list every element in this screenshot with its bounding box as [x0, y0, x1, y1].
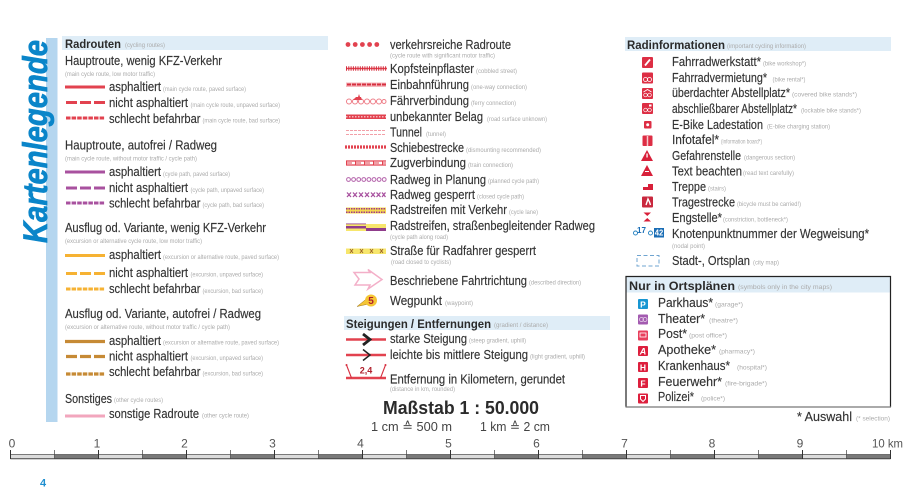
row: constriction: (constriction, bottleneck*)	[723, 218, 788, 224]
legend row: yellow paved: (excursion or alternative route, paved surface)	[163, 255, 279, 261]
legend row: purple paved	[65, 165, 230, 179]
scale bar	[9, 436, 903, 459]
row: read text carefully: Text beachten	[672, 164, 742, 178]
legend row: dismounting: (dismounting recommended)	[466, 148, 541, 154]
row: city map: (city map)	[753, 260, 779, 266]
legend row: brown unpaved: nicht asphaltiert	[109, 350, 188, 364]
group heading: Sonstiges	[65, 392, 163, 406]
legend row: distance: (distance in km, rounded)	[390, 387, 455, 393]
legend row: waypoint: (waypoint)	[445, 301, 473, 307]
scale numbers: 7	[621, 436, 628, 450]
row: bicycle must be carried: Tragestrecke	[672, 196, 735, 210]
legend row: purple unpaved: nicht asphaltiert	[109, 181, 188, 195]
legend row: red bad surface	[66, 112, 280, 126]
scale numbers: 8	[709, 436, 716, 450]
group heading: Ausflug wenig KFZ-Verkehr: Ausflug od. Variante, wenig KFZ-Verkehr	[65, 221, 266, 235]
legend row: closed path	[347, 188, 524, 202]
legend row: yellow unpaved: (excursion, unpaved surface)	[190, 272, 263, 278]
row: dangerous section: (dangerous section)	[744, 156, 795, 162]
legend row: planned path: Radweg in Planung	[390, 173, 486, 187]
title: Kartenlegende vertical band: Kartenlegende	[17, 40, 55, 243]
row: police: (police*)	[701, 396, 725, 402]
row: pharmacy: A	[639, 346, 646, 356]
group heading: Ausflug autofrei: Ausflug od. Variante, autofrei / Radweg	[65, 307, 261, 321]
heading: Radinformationen	[625, 37, 891, 52]
legend row: cycle lane: Radstreifen mit Verkehr	[390, 203, 507, 217]
legend row: waypoint: 5	[368, 296, 374, 307]
legend row: red bad surface: (main cycle route, bad surface)	[202, 118, 280, 124]
row: constriction: Engstelle*	[672, 211, 722, 225]
legend row: yellow bad surface	[66, 282, 263, 296]
group heading: Ausflug wenig KFZ-Verkehr	[65, 221, 266, 245]
legend row: red unpaved: nicht asphaltiert	[109, 96, 188, 110]
row: lockable bike stands: (lockable bike stands*)	[801, 108, 861, 114]
legend row: yellow paved: asphaltiert	[109, 248, 161, 262]
legend row: yellow unpaved	[66, 266, 263, 280]
legend row: yellow bad surface: (excursion, bad surface)	[202, 289, 263, 295]
legend row: cycle lane: (cycle lane)	[509, 210, 538, 216]
legend row: one-way: (one-way connection)	[471, 85, 527, 91]
legend row: distance	[346, 364, 565, 393]
legend row: tunnel: (tunnel)	[426, 132, 446, 138]
row: hospital: Krankenhaus*	[658, 359, 730, 373]
group heading: Hauptroute wenig KFZ-Verkehr: (main cycle route, low motor traffic)	[65, 72, 155, 78]
legend row: steep gradient: (steep gradient, uphill)	[469, 338, 526, 344]
row: post office: (post office*)	[689, 334, 727, 340]
footnote: Auswahl: (* selection)	[856, 416, 890, 422]
heading: Nur in Ortsplänen: Nur in Ortsplänen	[629, 279, 735, 293]
row: dangerous section	[641, 149, 795, 163]
legend row: red unpaved	[66, 96, 280, 110]
legend row: steep gradient	[346, 332, 526, 346]
row: bike workshop: (bike workshop*)	[763, 62, 806, 68]
row: dangerous section: Gefahrenstelle	[672, 149, 741, 163]
legend row: one-way: Einbahnführung	[390, 78, 469, 92]
legend row: closed path: (closed cycle path)	[477, 194, 524, 200]
title: Kartenlegende vertical band	[17, 38, 58, 422]
group heading: Ausflug autofrei	[65, 307, 261, 331]
legend row: train: (train connection)	[468, 163, 513, 169]
legend row: brown bad surface: (excursion, bad surface)	[202, 372, 263, 378]
legend row: other route	[65, 407, 249, 421]
legend row: direction arrow	[354, 270, 581, 289]
legend row: train: Zugverbindung	[390, 156, 466, 170]
row: city map: Stadt-, Ortsplan	[672, 254, 750, 268]
legend row: busy route	[348, 38, 511, 60]
legend row: path along road: (cycle path along road)	[390, 235, 448, 241]
scale numbers: 5	[445, 436, 452, 450]
heading: Radrouten: Radrouten	[65, 37, 121, 51]
legend row: steep gradient: starke Steigung	[390, 332, 467, 346]
heading: Nur in Ortsplänen	[629, 279, 832, 293]
row: bike rental	[642, 71, 806, 85]
scale equivalences: 1 km ≙ 2 cm	[480, 419, 550, 434]
legend row: unknown surface	[346, 110, 547, 124]
row: city map	[637, 254, 779, 268]
heading: Nur in Ortsplänen: (symbols only in the city maps)	[738, 285, 832, 291]
heading: Radinformationen: Radinformationen	[627, 38, 725, 52]
heading: Steigungen / Entfernungen: (gradient / distance)	[494, 323, 548, 329]
row: e-bike charging: (E-bike charging station)	[767, 124, 830, 130]
legend row: unknown surface: unbekannter Belag	[390, 110, 483, 124]
heading: Radrouten	[62, 36, 328, 51]
legend row: brown paved	[65, 334, 279, 348]
row: stairs: Treppe	[672, 180, 706, 194]
scale numbers: 9	[797, 436, 804, 450]
row: police	[638, 390, 725, 404]
row: post office	[638, 327, 727, 341]
row: bike rental: (bike rental*)	[772, 78, 806, 84]
group heading: Ausflug wenig KFZ-Verkehr: (excursion or alternative cycle route, low motor traffic)	[65, 239, 202, 245]
row: bicycle must be carried	[642, 196, 801, 210]
legend row: yellow paved	[65, 248, 279, 262]
group heading: Sonstiges: (other cycle routes)	[114, 398, 163, 404]
legend row: red bad surface: schlecht befahrbar	[109, 112, 200, 126]
scale numbers: 10 km	[872, 436, 903, 450]
legend row: direction arrow: (described direction)	[529, 280, 581, 286]
legend row: purple unpaved: (cycle path, unpaved surface)	[190, 188, 264, 194]
legend row: planned path	[347, 173, 539, 187]
legend row: other route: sonstige Radroute	[109, 407, 199, 421]
footnote: Auswahl: * Auswahl	[797, 410, 852, 424]
legend row: purple unpaved	[66, 181, 264, 195]
row: covered bike stands: (covered bike stands*)	[792, 92, 857, 98]
legend row: train	[346, 156, 513, 170]
row: stairs	[643, 180, 726, 194]
page number: 4	[40, 478, 47, 490]
row: information board: Infotafel*	[672, 133, 719, 147]
legend row: direction arrow: Beschriebene Fahrtrichtung	[390, 274, 527, 288]
group heading: Ausflug autofrei: (excursion or alternative route, without motor traffic / cycle path)	[65, 325, 230, 331]
legend row: brown paved: asphaltiert	[109, 334, 161, 348]
legend row: cobbled	[346, 62, 517, 76]
row: e-bike charging: E-Bike Ladestation	[672, 118, 763, 132]
legend row: purple bad surface: (cycle path, bad surface)	[202, 203, 264, 209]
row: fire brigade: (fire-brigade*)	[725, 382, 767, 388]
row: nodal point: 42	[655, 228, 664, 238]
row: theatre	[638, 312, 738, 326]
group heading: Hauptroute autofrei: (main cycle route, without motor traffic / cycle path)	[65, 156, 197, 162]
heading: Steigungen / Entfernungen: Steigungen / Entfernungen	[346, 317, 491, 331]
row: lockable bike stands: abschließbarer Abstellplatz*	[672, 102, 797, 116]
row: fire brigade: F	[640, 378, 646, 388]
row: theatre: (theatre*)	[709, 318, 738, 324]
scale numbers: 4	[357, 436, 364, 450]
row: post office: Post*	[658, 327, 687, 341]
row: covered bike stands	[642, 86, 857, 100]
row: fire brigade: Feuerwehr*	[658, 375, 722, 389]
legend row: path along road: Radstreifen, straßenbegleitender Radweg	[390, 219, 595, 233]
legend row: road closed: Straße für Radfahrer gesperrt	[390, 244, 536, 258]
legend row: brown bad surface: schlecht befahrbar	[109, 365, 200, 379]
legend row: brown unpaved	[66, 350, 263, 364]
row: read text carefully: (read text carefully)	[743, 171, 794, 177]
row: hospital: H	[640, 362, 646, 372]
legend row: road closed	[346, 244, 536, 266]
legend row: ferry: Fährverbindung	[390, 94, 469, 108]
row: e-bike charging	[644, 118, 830, 132]
row: pharmacy	[638, 343, 755, 357]
legend row: red unpaved: (main cycle route, unpaved surface)	[190, 103, 280, 109]
row: hospital: (hospital*)	[737, 366, 767, 372]
legend row: closed path: Radweg gesperrt	[390, 188, 475, 202]
panel: special routes	[345, 38, 595, 308]
group heading: Hauptroute autofrei	[65, 138, 217, 162]
heading: Radrouten: (cycling routes)	[125, 43, 165, 49]
legend row: distance: 2,4	[360, 366, 372, 376]
scale title: Maßstab 1 : 50.000	[383, 398, 539, 418]
legend row: brown paved: (excursion or alternative route, paved surface)	[163, 340, 279, 346]
legend row: red paved: asphaltiert	[109, 80, 161, 94]
scale numbers: 2	[181, 436, 188, 450]
footnote: Auswahl	[797, 410, 890, 424]
legend row: cycle lane	[346, 203, 538, 217]
legend row: purple paved: (cycle path, paved surface)	[163, 172, 230, 178]
row: pharmacy: (pharmacy*)	[719, 350, 755, 356]
row: theatre: Theater*	[658, 312, 705, 326]
row: bike workshop	[642, 55, 806, 69]
panel: Steigungen / Entfernungen	[344, 316, 610, 434]
group heading: Hauptroute wenig KFZ-Verkehr	[65, 54, 222, 78]
scale numbers: 3	[269, 436, 276, 450]
group heading: Sonstiges: Sonstiges	[65, 392, 112, 406]
legend row: waypoint: Wegpunkt	[390, 294, 442, 308]
row: information board	[642, 133, 762, 147]
row: covered bike stands: überdachter Abstellplatz*	[672, 86, 790, 100]
legend row: yellow unpaved: nicht asphaltiert	[109, 266, 188, 280]
row: bicycle must be carried: (bicycle must be carried!)	[737, 202, 801, 208]
legend row: tunnel	[346, 126, 446, 140]
row: nodal point: (nodal point)	[672, 244, 705, 250]
legend row: busy route: (cycle route with significant motor traffic)	[390, 54, 495, 60]
legend row: tunnel: Tunnel	[390, 126, 422, 140]
scale numbers: 1	[94, 436, 101, 450]
legend row: cobbled: (cobbled street)	[476, 69, 517, 75]
panel: Radinformationen	[625, 37, 891, 268]
legend row: red paved	[65, 80, 246, 94]
legend row: planned path: (planned cycle path)	[488, 179, 539, 185]
scale equivalences	[371, 419, 550, 434]
legend row: yellow bad surface: schlecht befahrbar	[109, 282, 200, 296]
group heading: Hauptroute autofrei: Hauptroute, autofrei / Radweg	[65, 138, 217, 152]
row: bike workshop: Fahrradwerkstatt*	[672, 55, 761, 69]
legend row: cobbled: Kopfsteinpflaster	[390, 62, 474, 76]
legend row: brown bad surface	[66, 365, 263, 379]
row: garage: (garage*)	[715, 302, 743, 308]
row: garage: P	[640, 300, 646, 310]
heading: Radinformationen: (important cycling information)	[727, 44, 806, 50]
legend row: waypoint	[357, 294, 473, 308]
row: read text carefully	[641, 164, 794, 178]
row: police: Polizei*	[658, 390, 694, 404]
scale numbers: 0	[9, 436, 16, 450]
row: bike rental: Fahrradvermietung*	[672, 71, 767, 85]
row: garage	[638, 296, 743, 310]
legend row: light gradient: leichte bis mittlere Steigung	[390, 348, 528, 362]
legend row: one-way	[346, 78, 527, 92]
legend row: distance: Entfernung in Kilometern, gerundet	[390, 372, 565, 386]
legend row: ferry	[346, 94, 516, 108]
heading: Steigungen / Entfernungen	[344, 316, 610, 331]
row: constriction	[644, 211, 788, 225]
row: information board: (information board*)	[721, 140, 762, 146]
legend row: light gradient: (light gradient, uphill)	[530, 354, 585, 360]
legend row: dismounting: Schiebestrecke	[390, 141, 464, 155]
legend row: light gradient	[346, 348, 585, 362]
legend row: other route: (other cycle route)	[202, 414, 249, 420]
legend row: purple paved: asphaltiert	[109, 165, 161, 179]
legend row: path along road	[346, 219, 595, 241]
legend row: purple bad surface	[66, 196, 264, 210]
row: nodal point	[634, 226, 869, 250]
group heading: Hauptroute wenig KFZ-Verkehr: Hauptroute, wenig KFZ-Verkehr	[65, 54, 222, 68]
legend row: unknown surface: (road surface unknown)	[487, 117, 547, 123]
scale equivalences: 1 cm ≙ 500 m	[371, 419, 452, 434]
legend row: purple bad surface: schlecht befahrbar	[109, 196, 200, 210]
legend row: red paved: (main cycle route, paved surface)	[163, 87, 246, 93]
legend row: road closed: (road closed to cyclists)	[391, 260, 451, 266]
row: nodal point: Knotenpunktnummer der Wegweisung*	[672, 227, 869, 241]
row: nodal point: 17	[637, 226, 647, 235]
panel: Nur in Ortsplänen	[626, 276, 891, 408]
legend row: busy route: verkehrsreiche Radroute	[390, 38, 511, 52]
row: stairs: (stairs)	[708, 186, 726, 192]
row: hospital	[638, 359, 767, 373]
scale numbers: 6	[533, 436, 540, 450]
scale numbers	[9, 436, 903, 450]
row: pharmacy: Apotheke*	[658, 343, 716, 357]
legend row: ferry: (ferry connection)	[471, 101, 516, 107]
legend row: brown unpaved: (excursion, unpaved surface)	[190, 356, 263, 362]
panel: Radrouten	[62, 36, 328, 421]
row: garage: Parkhaus*	[658, 296, 713, 310]
row: fire brigade	[638, 375, 767, 389]
legend row: dismounting	[345, 141, 541, 155]
